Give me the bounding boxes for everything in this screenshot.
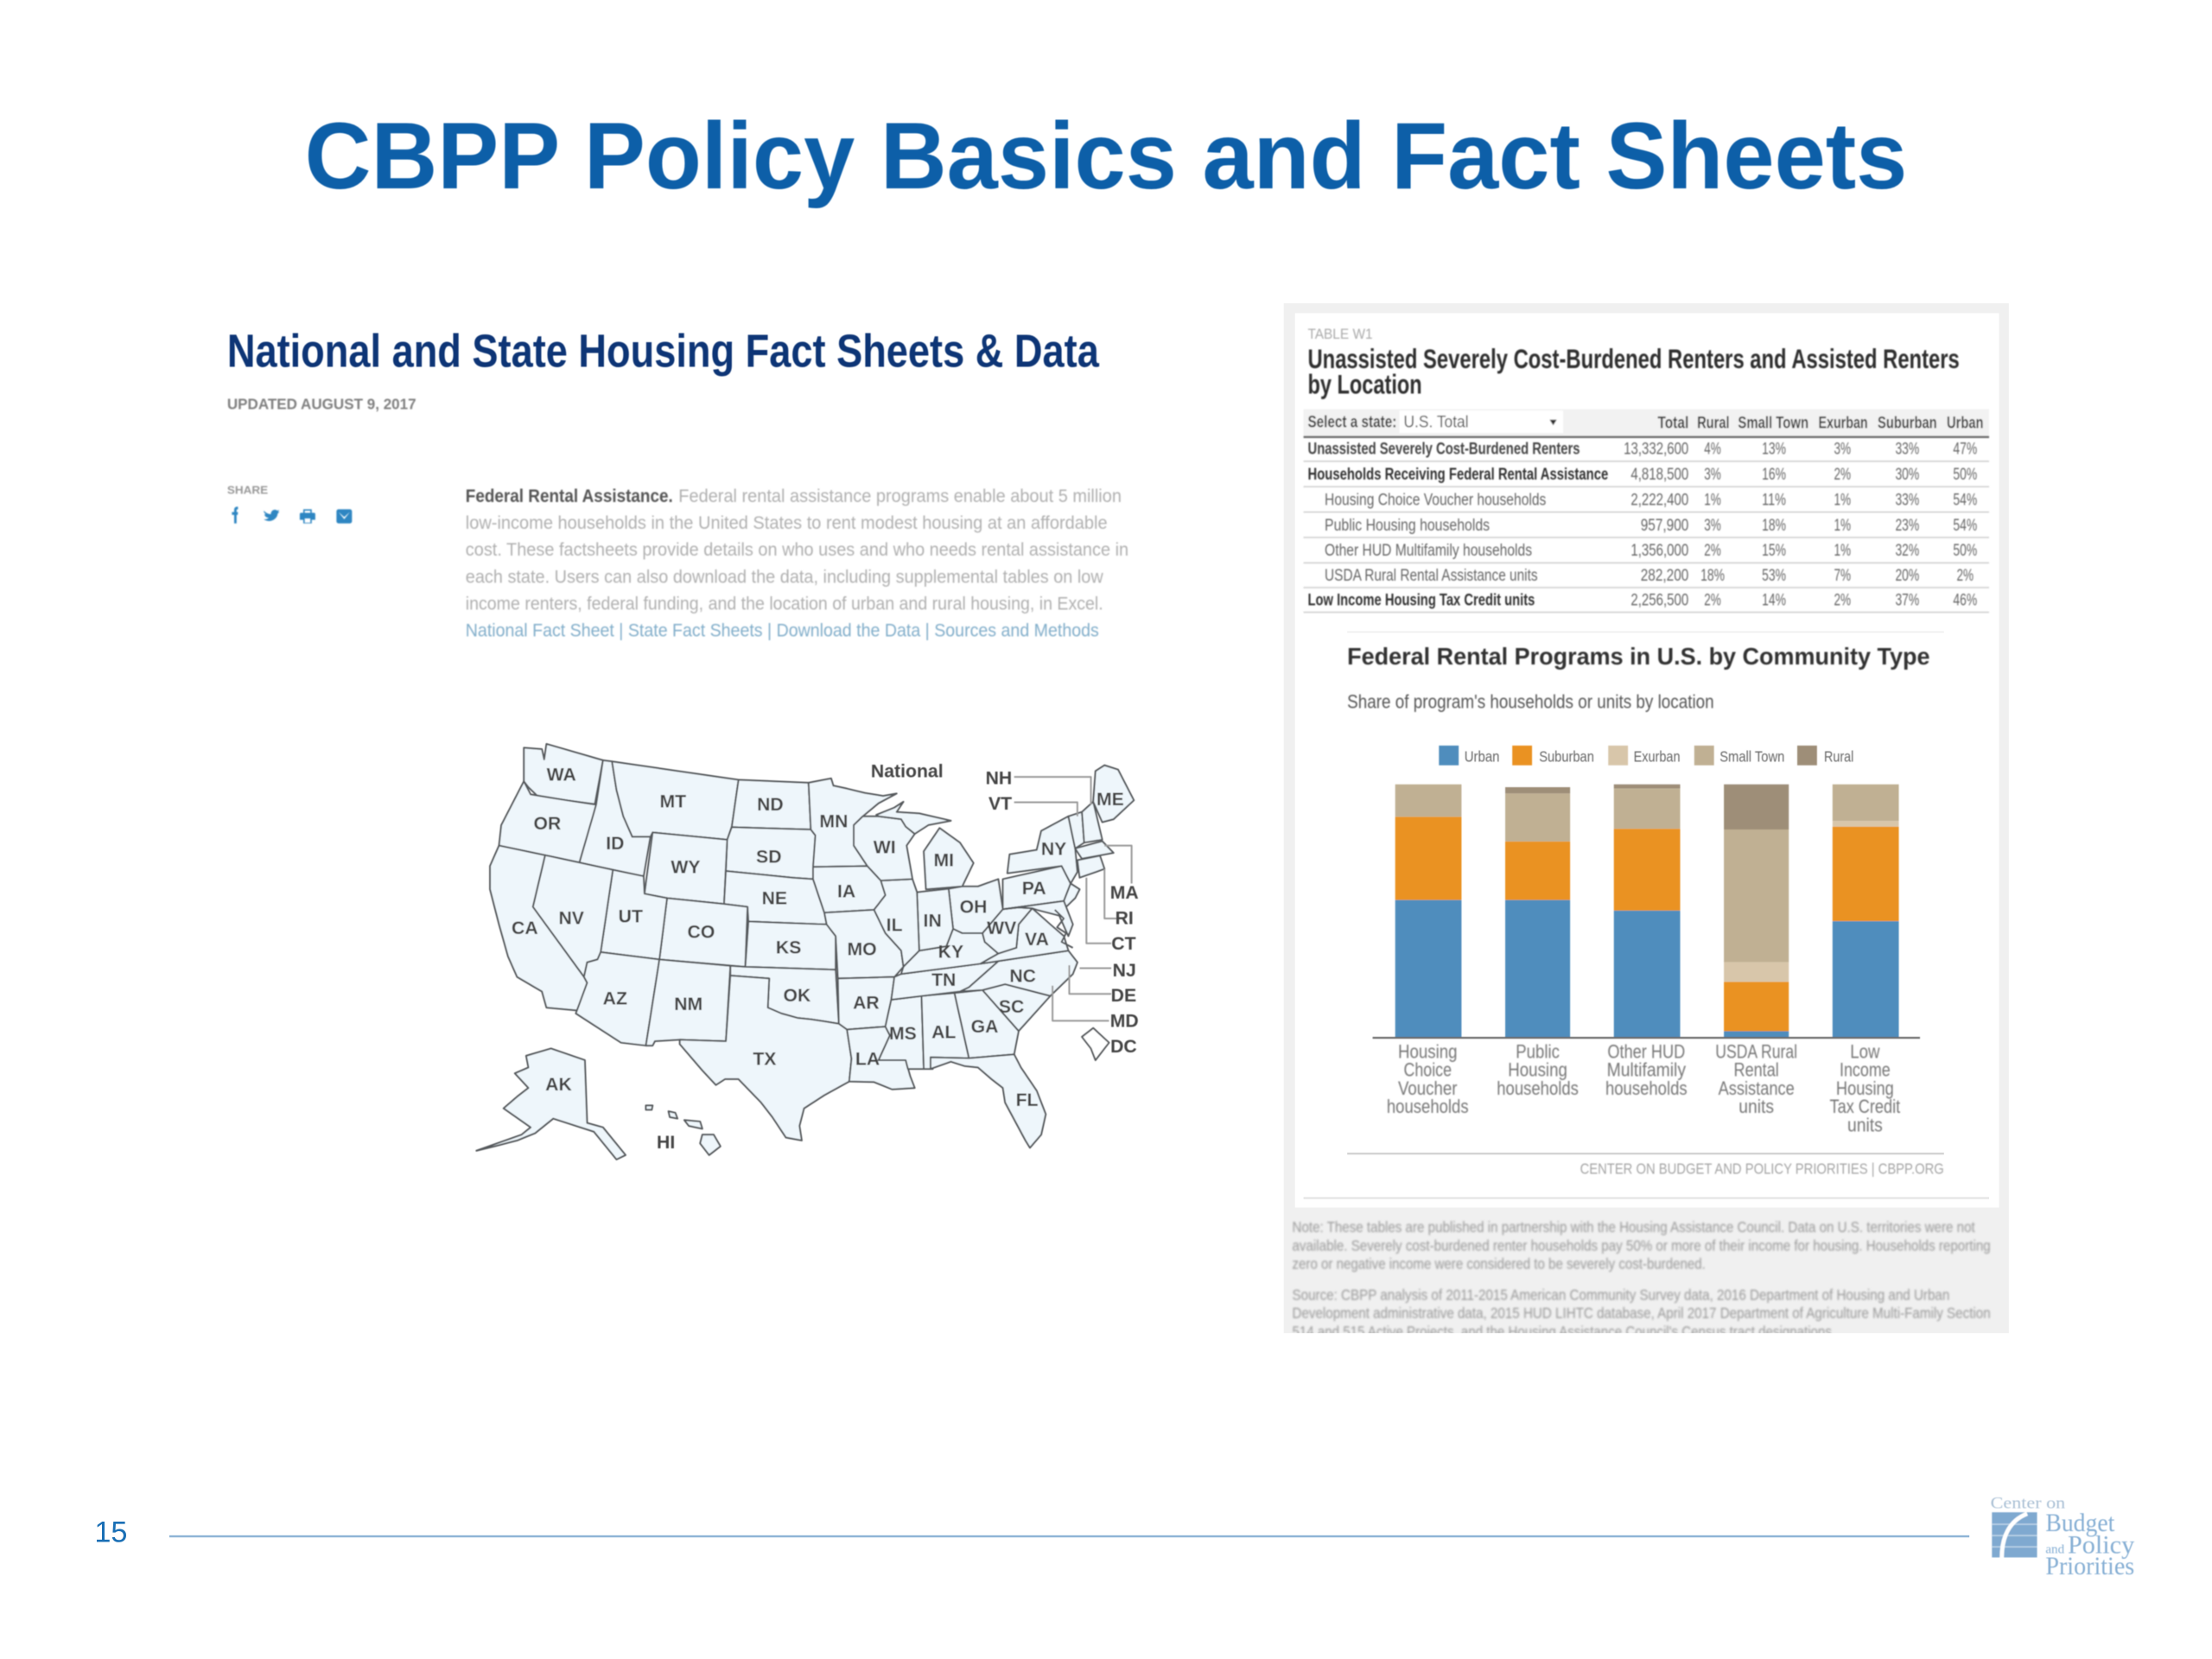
table values: 23% xyxy=(1895,516,1919,535)
map: state labels: KY xyxy=(938,943,963,963)
table row labels: Unassisted Severely Cost-Burdened Renters xyxy=(1307,440,1580,459)
paragraph: federal rental assistance: income renters, federal funding, and the location of urban and rural housing, in Excel. xyxy=(466,594,1103,613)
logo: center on budget and policy priorities: and Policy xyxy=(2045,1532,2135,1560)
map: state labels: AL xyxy=(931,1023,956,1043)
table xyxy=(1304,409,1989,613)
table header row: Exurban xyxy=(1818,414,1868,433)
table header row xyxy=(1304,409,1989,438)
map: state labels: CA xyxy=(512,918,538,938)
table values: 50% xyxy=(1953,541,1977,560)
map: state labels xyxy=(512,762,1139,1153)
table header row: Select a state: xyxy=(1307,413,1396,432)
paragraph: federal rental assistance: Federal rental assistance programs enable about 5 million xyxy=(678,486,1122,506)
map: state labels: MI xyxy=(933,850,954,870)
table heading: Unassisted Severely Cost-Burdened Renters and Assisted Renters xyxy=(1307,344,1960,374)
table values: 54% xyxy=(1953,516,1977,535)
chart title: Federal Rental Programs in U.S. by Community Type xyxy=(1347,643,1929,670)
map: state labels: LA xyxy=(855,1050,880,1070)
map: state labels: NY xyxy=(1041,839,1066,859)
bar: housing choice voucher xyxy=(1395,785,1461,1037)
page number: 15 xyxy=(94,1516,128,1548)
map: state labels: ME xyxy=(1096,790,1124,810)
map: state labels: IA xyxy=(837,881,855,901)
table values: 32% xyxy=(1895,541,1919,560)
notes and source xyxy=(1293,1218,1991,1340)
map: state labels: OK xyxy=(784,986,811,1006)
table values: 2,256,500 xyxy=(1630,590,1688,609)
table values: 16% xyxy=(1762,465,1786,484)
table values: 54% xyxy=(1953,490,1977,509)
map: state labels: RI xyxy=(1116,908,1134,928)
updated date: UPDATED AUGUST 9, 2017 xyxy=(227,395,416,412)
title: CBPP Policy Basics and Fact Sheets xyxy=(305,104,1907,209)
table row labels: Households Receiving Federal Rental Assistance xyxy=(1307,465,1608,484)
chart legend: Urban xyxy=(1465,748,1500,766)
panel background xyxy=(1284,303,2009,1333)
map: state labels: AK xyxy=(545,1075,573,1095)
map: state labels: NJ xyxy=(1113,961,1136,981)
map: state labels: MO xyxy=(847,939,877,959)
map: state labels: WV xyxy=(987,918,1016,938)
table values: 2% xyxy=(1704,541,1721,560)
table values: 18% xyxy=(1700,566,1725,585)
map: state labels: NV xyxy=(558,908,584,928)
chart axis labels: Low xyxy=(1850,1040,1880,1062)
map: state labels: MS xyxy=(889,1024,917,1044)
table header row: Suburban xyxy=(1878,414,1937,433)
map: state labels: NH xyxy=(986,769,1012,789)
notes and source: zero or negative income were considered to be severely cost-burdened. xyxy=(1293,1255,1706,1273)
table values: 37% xyxy=(1895,590,1919,609)
chart legend: Rural xyxy=(1824,748,1853,766)
paragraph: federal rental assistance: each state. Users can also download the data, including supplemental tables on low xyxy=(466,567,1103,587)
map: state labels: TN xyxy=(931,970,956,990)
paragraph: federal rental assistance: low-income households in the United States to rent modest housing at an affordable xyxy=(466,513,1108,533)
table values: 2% xyxy=(1704,590,1721,609)
table values: 4% xyxy=(1704,440,1721,459)
paragraph: federal rental assistance: Federal Rental Assistance. xyxy=(466,486,673,506)
map: state labels: National xyxy=(871,762,944,782)
table values: 3% xyxy=(1704,516,1721,535)
map: state labels: WY xyxy=(671,858,701,878)
table values: 4,818,500 xyxy=(1630,465,1688,484)
table values: 1% xyxy=(1704,490,1721,509)
table values: 282,200 xyxy=(1641,566,1688,585)
chart axis labels: units xyxy=(1847,1114,1883,1135)
chart axis labels: Rental xyxy=(1734,1059,1779,1081)
table values: 1% xyxy=(1834,516,1851,535)
chart axis labels: households xyxy=(1497,1077,1579,1099)
table values: 33% xyxy=(1895,440,1919,459)
table values: 2,222,400 xyxy=(1630,490,1688,509)
table row labels: Public Housing households xyxy=(1325,516,1490,535)
map: state labels: ND xyxy=(757,795,784,815)
table values: 1% xyxy=(1834,490,1851,509)
panel: fact sheets web page xyxy=(227,325,1139,1160)
chart axis labels: units xyxy=(1738,1096,1774,1117)
chart legend: Suburban xyxy=(1539,748,1594,766)
map: state labels: HI xyxy=(657,1133,675,1153)
table label: TABLE W1 xyxy=(1307,327,1373,342)
panel: table and chart xyxy=(1284,303,2009,1340)
map: state labels: DE xyxy=(1111,986,1136,1006)
table header row: Total xyxy=(1657,414,1688,433)
table values: 53% xyxy=(1762,566,1786,585)
table values: 30% xyxy=(1895,465,1919,484)
map: state labels: SD xyxy=(756,847,782,867)
chart axis labels: Other HUD xyxy=(1607,1040,1685,1062)
map: state labels: WA xyxy=(547,766,576,785)
table header row: U.S. Total xyxy=(1403,413,1469,432)
chart axis labels: Multifamily xyxy=(1607,1059,1686,1081)
table values: 15% xyxy=(1762,541,1786,560)
logo mark xyxy=(1992,1512,2037,1557)
table heading: by Location xyxy=(1307,370,1422,400)
logo: center on budget and policy priorities: Budget xyxy=(2045,1510,2114,1537)
map: state labels: MA xyxy=(1110,883,1139,903)
table values: 3% xyxy=(1834,440,1851,459)
table header row: Small Town xyxy=(1738,414,1808,433)
table values: 2% xyxy=(1956,566,1974,585)
chart axis labels xyxy=(1387,1040,1900,1135)
map: state labels: MN xyxy=(819,812,848,832)
table values: 7% xyxy=(1834,566,1851,585)
notes and source: available. Severely cost-burdened renter households pay 50% or more of their income for housing. Households reporting xyxy=(1293,1236,1991,1254)
chart axis labels: households xyxy=(1605,1077,1688,1099)
chart axis labels: USDA Rural xyxy=(1715,1040,1797,1062)
chart axis labels: Choice xyxy=(1403,1059,1452,1081)
logo: center on budget and policy priorities: Center on xyxy=(1991,1494,2066,1512)
table values: 2% xyxy=(1834,590,1851,609)
map: state labels: WI xyxy=(874,838,896,858)
chart axis labels: Assistance xyxy=(1719,1077,1795,1099)
share label: SHARE xyxy=(227,483,269,496)
table values: 47% xyxy=(1953,440,1977,459)
chart legend: Exurban xyxy=(1634,748,1680,766)
table header row: Urban xyxy=(1947,414,1984,433)
bar: low income housing tax credit xyxy=(1833,785,1899,1037)
notes and source: Note: These tables are published in partnership with the Housing Assistance Council. Data on U.S. territories were not xyxy=(1293,1218,1975,1236)
map: state labels: IN xyxy=(924,912,942,931)
bar: usda rural rental assistance xyxy=(1724,785,1789,1037)
table values: 14% xyxy=(1762,590,1786,609)
chart axis labels: households xyxy=(1387,1096,1469,1117)
map: state labels: MD xyxy=(1110,1012,1139,1032)
map: state labels: VA xyxy=(1025,930,1049,950)
map: state labels: CT xyxy=(1111,934,1136,954)
white card xyxy=(1295,313,1999,1208)
table values: 13,332,600 xyxy=(1624,440,1688,459)
chart credit: CENTER ON BUDGET AND POLICY PRIORITIES | CBPP.ORG xyxy=(1580,1160,1944,1177)
table row labels xyxy=(1307,440,1608,609)
map: state labels: ID xyxy=(606,834,624,854)
table row labels: Housing Choice Voucher households xyxy=(1325,490,1547,509)
bar: public housing xyxy=(1505,787,1570,1037)
map: state labels: OH xyxy=(960,897,987,917)
table values: 1% xyxy=(1834,541,1851,560)
footer rule xyxy=(169,1535,1969,1537)
heading: national and state fact sheets: National and State Housing Fact Sheets & Data xyxy=(227,325,1100,377)
paragraph: federal rental assistance: National Fact Sheet | State Fact Sheets | Download the Data | Sources and Methods xyxy=(466,620,1099,640)
map: state labels: TX xyxy=(753,1050,776,1070)
map: state labels: PA xyxy=(1022,879,1046,899)
map: state labels: AR xyxy=(853,993,880,1013)
map: state labels: KS xyxy=(776,938,801,958)
table row labels: Low Income Housing Tax Credit units xyxy=(1307,590,1535,609)
table values: 2% xyxy=(1834,465,1851,484)
table values: 3% xyxy=(1704,465,1721,484)
table values: 33% xyxy=(1895,490,1919,509)
chart axis labels: Housing xyxy=(1398,1040,1458,1062)
map: state labels: NM xyxy=(674,995,702,1014)
map: state labels: OR xyxy=(534,814,561,834)
map: state labels: NC xyxy=(1009,966,1036,986)
table values: 46% xyxy=(1953,590,1977,609)
map: state labels: AZ xyxy=(603,988,627,1008)
chart axis labels: Housing xyxy=(1508,1059,1567,1081)
paragraph: federal rental assistance xyxy=(466,486,1128,640)
chart axis labels: Housing xyxy=(1836,1077,1894,1099)
logo: center on budget and policy priorities xyxy=(1991,1494,2135,1580)
chart axis labels: Tax Credit xyxy=(1830,1096,1900,1117)
map: state labels: SC xyxy=(999,997,1024,1017)
table values: 11% xyxy=(1762,490,1786,509)
notes and source: Source: CBPP analysis of 2011-2015 American Community Survey data, 2016 Department of Housing and Urban xyxy=(1293,1286,1949,1303)
bar: other hud multifamily xyxy=(1614,785,1680,1037)
map: state labels: MT xyxy=(659,792,686,812)
map: state labels: FL xyxy=(1016,1090,1039,1110)
table values: 1,356,000 xyxy=(1630,541,1688,560)
paragraph: federal rental assistance: cost. These factsheets provide details on who uses and who needs rental assistance in xyxy=(466,540,1128,560)
map: state labels: CO xyxy=(688,923,715,943)
map: state labels: UT xyxy=(619,907,643,927)
table row labels: Other HUD Multifamily households xyxy=(1325,541,1532,560)
chart axis labels: Income xyxy=(1840,1059,1891,1081)
table values: 50% xyxy=(1953,465,1977,484)
table header row: Rural xyxy=(1697,414,1730,433)
logo: center on budget and policy priorities: Priorities xyxy=(2045,1553,2134,1580)
chart legend: Small Town xyxy=(1719,748,1784,766)
table values: 957,900 xyxy=(1641,516,1688,535)
chart subtitle: Share of program's households or units by location xyxy=(1347,691,1714,713)
chart axis labels: Voucher xyxy=(1398,1077,1458,1099)
map: state labels: NE xyxy=(762,889,787,909)
notes and source: Development administrative data, 2015 HUD LIHTC database, April 2017 Department of Agriculture Multi-Family Section xyxy=(1293,1305,1991,1322)
table values: 18% xyxy=(1762,516,1786,535)
table values xyxy=(1624,440,1977,609)
map: united states state selector xyxy=(476,744,1139,1160)
table heading xyxy=(1307,344,1960,400)
map: state labels: GA xyxy=(971,1017,999,1037)
chart axis labels: Public xyxy=(1516,1040,1560,1062)
table values: 20% xyxy=(1895,566,1919,585)
table values: 13% xyxy=(1762,440,1786,459)
map: state labels: DC xyxy=(1110,1037,1137,1057)
icons: share buttons xyxy=(232,506,352,524)
notes and source: 514 and 515 Active Projects, and the Housing Assistance Council's Census tract designations. xyxy=(1293,1323,1835,1340)
map: state labels: IL xyxy=(887,916,903,936)
map: state labels: VT xyxy=(988,794,1012,814)
stacked bar chart xyxy=(1373,785,1920,1039)
table row labels: USDA Rural Rental Assistance units xyxy=(1325,566,1538,585)
chart legend xyxy=(1439,746,1853,766)
